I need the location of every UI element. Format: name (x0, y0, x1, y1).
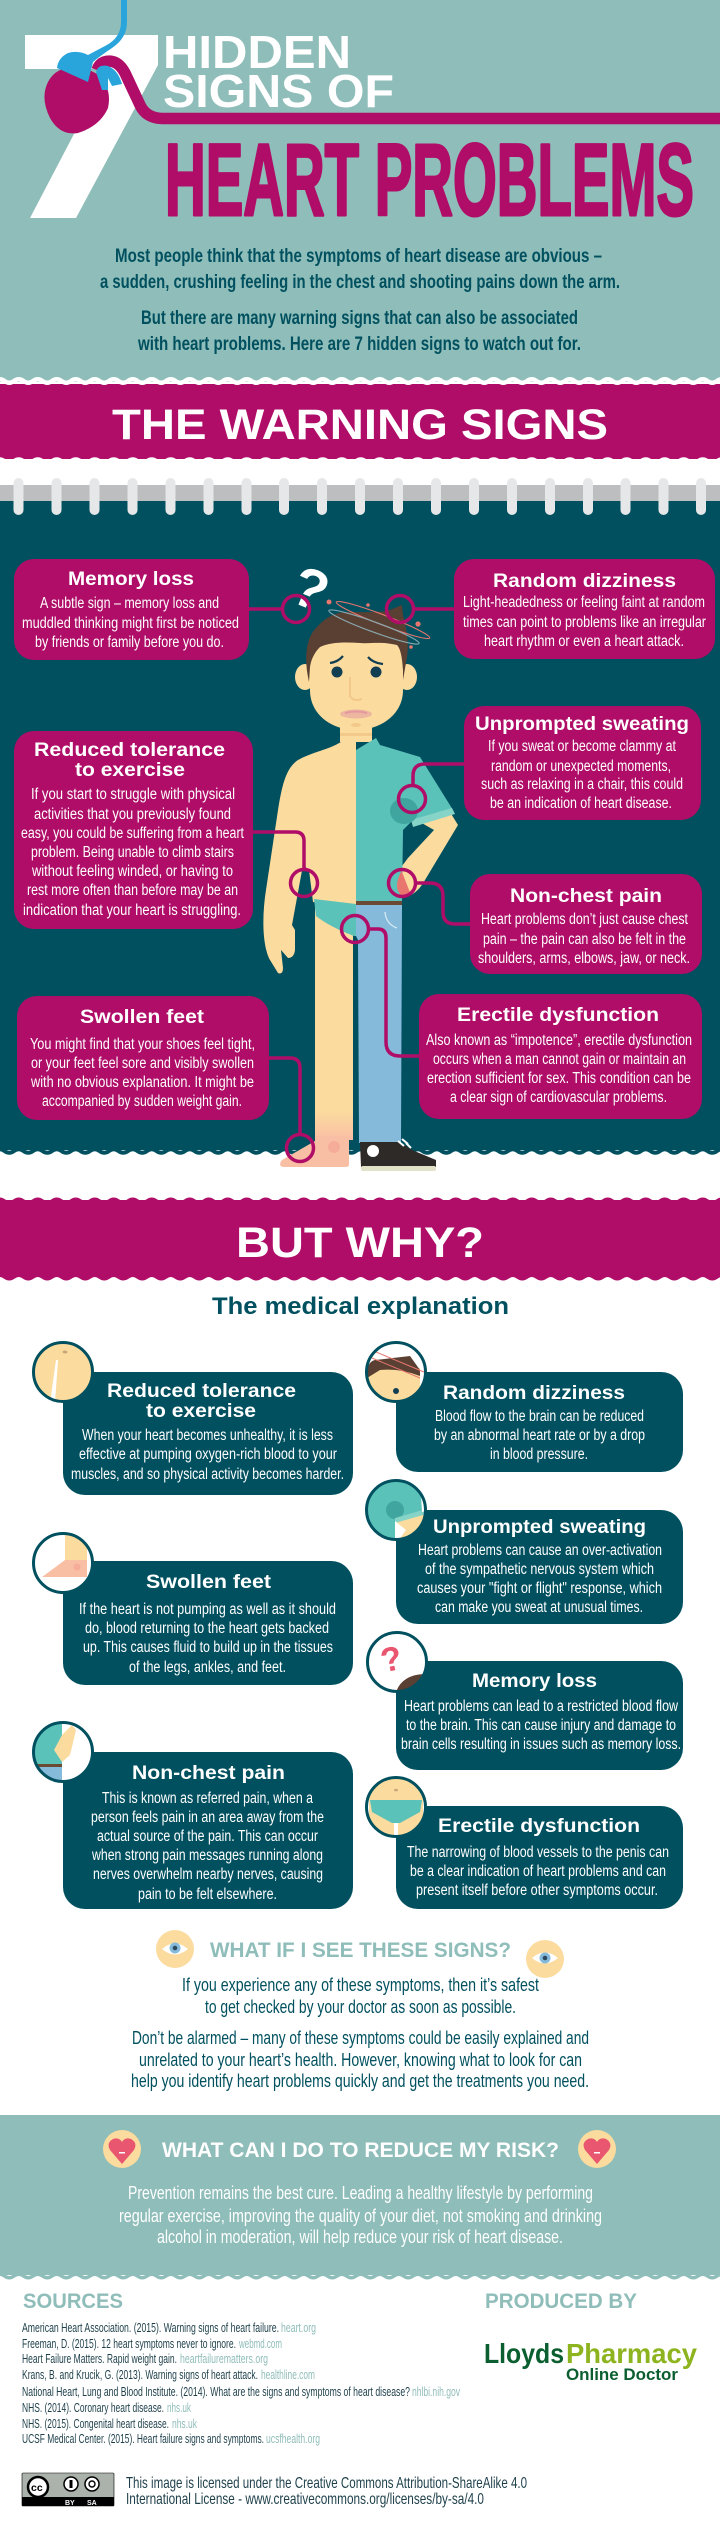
panel: swollen feet: You might find that your shoes feel tight, (30, 1036, 255, 1053)
jeans (356, 905, 402, 1143)
explanation: erectile dysfunction: Erectile dysfunction (438, 1816, 640, 1837)
text: what to do: Don’t be alarmed – many of these symptoms could be easily explained and (132, 2028, 589, 2048)
heading: the medical explanation: The medical explanation (212, 1293, 509, 1320)
swollen foot (280, 1136, 349, 1167)
pins (14, 478, 706, 515)
text: what to do (131, 1975, 589, 2091)
icon: creative commons badge (22, 2473, 114, 2507)
panel: erectile dysfunction: a clear sign of cardiovascular problems. (450, 1089, 667, 1106)
text: license: International License - www.creativecommons.org/licenses/by-sa/4.0 (126, 2491, 484, 2508)
panel: reduced tolerance to exercise: without feeling winded, or having to (31, 863, 233, 880)
title: hidden signs of: SIGNS OF (163, 65, 394, 117)
icon: hand on waist (30, 1720, 93, 1787)
explanation: unprompted sweating: can make you sweat at unusual times. (435, 1599, 643, 1616)
icon: heart (44, 0, 127, 133)
source list: healthline.com (261, 2367, 315, 2382)
source list: Heart Failure Matters. Rapid weight gain. (22, 2351, 177, 2366)
source list: heart.org (281, 2320, 316, 2335)
explanation: non-chest pain: nerves overwhelm nearby nerves, causing (93, 1866, 323, 1883)
heading: sources: SOURCES (23, 2290, 123, 2313)
panel: unprompted sweating: Unprompted sweating (475, 714, 689, 735)
explanation: unprompted sweating: Heart problems can cause an over-activation (418, 1542, 662, 1559)
source list: ucsfhealth.org (266, 2431, 320, 2446)
neck (340, 725, 372, 742)
explanation: swollen feet: of the legs, ankles, and feet. (129, 1659, 286, 1676)
panel: reduced tolerance to exercise: activities that you previously found (34, 806, 231, 823)
panel: unprompted sweating: If you sweat or become clammy at (488, 738, 677, 755)
banner: the warning signs: THE WARNING SIGNS (112, 401, 608, 449)
source list: National Heart, Lung and Blood Institute. (2014). What are the signs and symptoms of heart disease? (22, 2384, 410, 2399)
intro text (100, 246, 620, 355)
text: what to do: help you identify heart problems quickly and get the treatments you need. (131, 2071, 589, 2091)
nose and mouth (340, 677, 372, 727)
icon: sweat patch (366, 1480, 430, 1545)
panel: reduce risk (0, 2115, 720, 2278)
explanation: memory loss: Memory loss (472, 1671, 597, 1692)
explanation: non-chest pain: This is known as referred pain, when a (102, 1790, 313, 1807)
icon: right heart (578, 2130, 616, 2168)
panel: reduced tolerance to exercise: Reduced tolerance (34, 740, 225, 761)
panel: erectile dysfunction (419, 994, 702, 1119)
text: license (126, 2475, 527, 2508)
banner: but why (0, 1199, 720, 1279)
panel: memory loss: by friends or family before you do. (35, 634, 224, 651)
eyes and brows (330, 656, 383, 678)
hair (306, 605, 408, 682)
pain wedge (397, 870, 402, 896)
artery line (97, 61, 720, 118)
explanation: random dizziness (366, 1342, 683, 1472)
source list: NHS. (2014). Coronary heart disease. (22, 2400, 164, 2415)
text: what to do: unrelated to your heart’s health. However, knowing what to look for can (139, 2050, 582, 2070)
explanation: memory loss (367, 1632, 683, 1770)
panel: unprompted sweating: random or unexpected moments, (491, 758, 671, 775)
intro text: But there are many warning signs that can also be associated (141, 308, 578, 329)
explanation: non-chest pain (30, 1720, 353, 1909)
intro text: Most people think that the symptoms of heart disease are obvious – (115, 246, 602, 267)
source list: nhs.uk (167, 2400, 191, 2415)
icon: swollen foot (33, 1530, 93, 1593)
panel: swollen feet: with no obvious explanation. It might be (30, 1074, 254, 1091)
explanation: non-chest pain: Non-chest pain (132, 1763, 285, 1784)
text: what to do: to get checked by your doctor as soon as possible. (205, 1997, 516, 2017)
briefs (314, 899, 356, 936)
panel: reduced tolerance to exercise: problem. Being unable to climb stairs (31, 844, 234, 861)
source list: nhlbi.nih.gov (412, 2384, 460, 2399)
intro text: with heart problems. Here are 7 hidden signs to watch out for. (137, 334, 581, 355)
panel: memory loss (14, 559, 249, 660)
panel: random dizziness: Random dizziness (493, 571, 676, 592)
shoe (360, 1142, 436, 1167)
panel: non-chest pain (470, 874, 702, 974)
panel: reduced tolerance to exercise (14, 731, 253, 929)
explanation: non-chest pain: actual source of the pain. This can occur (97, 1828, 318, 1845)
icon: creative commons badge: SA (87, 2500, 97, 2507)
heading: what if i see these signs: WHAT IF I SEE THESE SIGNS? (210, 1939, 511, 1962)
face (310, 640, 403, 730)
explanation: reduced tolerance (30, 1340, 353, 1495)
icon: question mark: ? (377, 1639, 405, 1680)
source list: UCSF Medical Center. (2015). Heart failure signs and symptoms. (22, 2431, 264, 2446)
left arm and torso (263, 742, 356, 973)
panel: swollen feet: Swollen feet (80, 1007, 205, 1028)
text: what to do: If you experience any of these symptoms, then it’s safest (182, 1975, 539, 1995)
icon: left eye (156, 1930, 194, 1968)
icon: creative commons badge: cc (31, 2482, 43, 2494)
panel: swollen feet: accompanied by sudden weight gain. (42, 1093, 242, 1110)
left leg (315, 905, 353, 1140)
right forearm (402, 812, 458, 897)
explanation: swollen feet: Swollen feet (146, 1572, 272, 1593)
banner: the warning signs (0, 379, 720, 463)
icon: right eye (526, 1940, 564, 1978)
panel: reduced tolerance to exercise: rest more often than before may be an (27, 882, 238, 899)
source list: NHS. (2015). Congenital heart disease. (22, 2416, 169, 2431)
explanation: reduced tolerance: to exercise (146, 1401, 256, 1422)
source list: Krans, B. and Krucik, G. (2013). Warning signs of heart attack. (22, 2367, 258, 2382)
panel: unprompted sweating (464, 706, 701, 820)
title: hidden signs of (163, 26, 394, 117)
icon: left heart (103, 2130, 141, 2168)
explanation: reduced tolerance: Reduced tolerance (107, 1381, 296, 1402)
icon: question mark (367, 1632, 427, 1695)
text: Prevention remains the best cure. Leading a healthy lifestyle by performing (128, 2183, 593, 2203)
panel: reduced tolerance to exercise: easy, you could be suffering from a heart (21, 825, 245, 842)
explanation: unprompted sweating (366, 1480, 683, 1624)
panel: swollen feet (17, 996, 269, 1120)
explanation: non-chest pain: pain to be felt elsewhere. (138, 1886, 277, 1903)
dizzy rings and stars (326, 597, 431, 649)
icon: question mark: ? (283, 553, 338, 624)
explanation: swollen feet: up. This causes fluid to build up in the tissues (83, 1639, 333, 1656)
text: license: This image is licensed under the Creative Commons Attribution-ShareAlike 4.0 (126, 2475, 527, 2492)
panel: memory loss: A subtle sign – memory loss and (40, 595, 219, 612)
explanation: swollen feet (33, 1530, 353, 1685)
explanation: non-chest pain: when strong pain messages running along (91, 1847, 323, 1864)
warning signs panel background (0, 478, 720, 1153)
connectors (249, 596, 470, 1162)
explanation: reduced tolerance: effective at pumping oxygen-rich blood to your (79, 1446, 337, 1463)
panel: memory loss: muddled thinking might first be noticed (22, 615, 239, 632)
logo: lloyds pharmacy online doctor (484, 2338, 697, 2384)
explanation: random dizziness: Random dizziness (443, 1383, 625, 1404)
heading: WHAT CAN I DO TO REDUCE MY RISK? (162, 2139, 559, 2162)
ears (295, 664, 315, 690)
logo: lloyds pharmacy online doctor: Pharmacy (566, 2338, 697, 2369)
source list: Freeman, D. (2015). 12 heart symptoms never to ignore. (22, 2336, 236, 2351)
explanation: reduced tolerance: When your heart becomes unhealthy, it is less (82, 1427, 333, 1444)
shirt (356, 738, 453, 902)
explanation: random dizziness: by an abnormal heart rate or by a drop (434, 1427, 645, 1444)
explanation: unprompted sweating: causes your "fight or flight" response, which (417, 1580, 662, 1597)
text (119, 2183, 602, 2247)
logo: lloyds pharmacy online doctor: Lloyds (484, 2338, 564, 2369)
title: hidden signs of: HIDDEN (163, 26, 351, 78)
panel: reduced tolerance to exercise: indication that your heart is struggling. (23, 902, 241, 919)
explanation: swollen feet: If the heart is not pumping as well as it should (79, 1601, 336, 1618)
explanation: random dizziness: in blood pressure. (490, 1446, 588, 1463)
source list: webmd.com (238, 2336, 282, 2351)
panel: reduced tolerance to exercise: to exercise (75, 760, 185, 781)
text: alcohol in moderation, will help reduce your risk of heart disease. (157, 2227, 563, 2247)
panel: non-chest pain: Non-chest pain (510, 886, 662, 907)
icon: creative commons badge: BY (65, 2500, 75, 2507)
heading: produced by: PRODUCED BY (485, 2290, 637, 2313)
explanation: erectile dysfunction (366, 1777, 683, 1909)
explanation: non-chest pain: person feels pain in an area away from the (91, 1809, 324, 1826)
source list: American Heart Association. (2015). Warning signs of heart failure. (22, 2320, 279, 2335)
panel: random dizziness (454, 559, 715, 659)
source list (22, 2320, 460, 2446)
panel: unprompted sweating: be an indication of heart disease. (490, 795, 672, 812)
explanation: swollen feet: do, blood returning to the heart gets backed (85, 1620, 329, 1637)
explanation: unprompted sweating: of the sympathetic nervous system which (425, 1561, 654, 1578)
source list: nhs.uk (172, 2416, 197, 2431)
icon: dizzy head (366, 1342, 426, 1402)
explanation: random dizziness: Blood flow to the brain can be reduced (435, 1408, 644, 1425)
panel: reduced tolerance to exercise: If you start to struggle with physical (31, 786, 235, 803)
logo: lloyds pharmacy online doctor: Online Doctor (566, 2365, 678, 2384)
icon: torso (32, 1341, 94, 1403)
explanation: erectile dysfunction: present itself before other symptoms occur. (416, 1882, 658, 1899)
panel: erectile dysfunction: Erectile dysfunction (457, 1005, 659, 1026)
banner: but why: BUT WHY? (236, 1219, 484, 1267)
big number 7 (25, 35, 158, 218)
text: regular exercise, improving the quality of your diet, not smoking and drinking (119, 2206, 602, 2226)
explanation: unprompted sweating: Unprompted sweating (433, 1517, 646, 1538)
panel: swollen feet: or your feet feel sore and visibly swollen (31, 1055, 254, 1072)
icon: waist (366, 1777, 426, 1839)
source list: heartfailurematters.org (180, 2351, 268, 2366)
illustration: man (263, 553, 458, 1171)
panel: memory loss: Memory loss (68, 569, 194, 590)
explanation: reduced tolerance: muscles, and so physical activity becomes harder. (71, 1466, 344, 1483)
header panel (0, 0, 720, 382)
